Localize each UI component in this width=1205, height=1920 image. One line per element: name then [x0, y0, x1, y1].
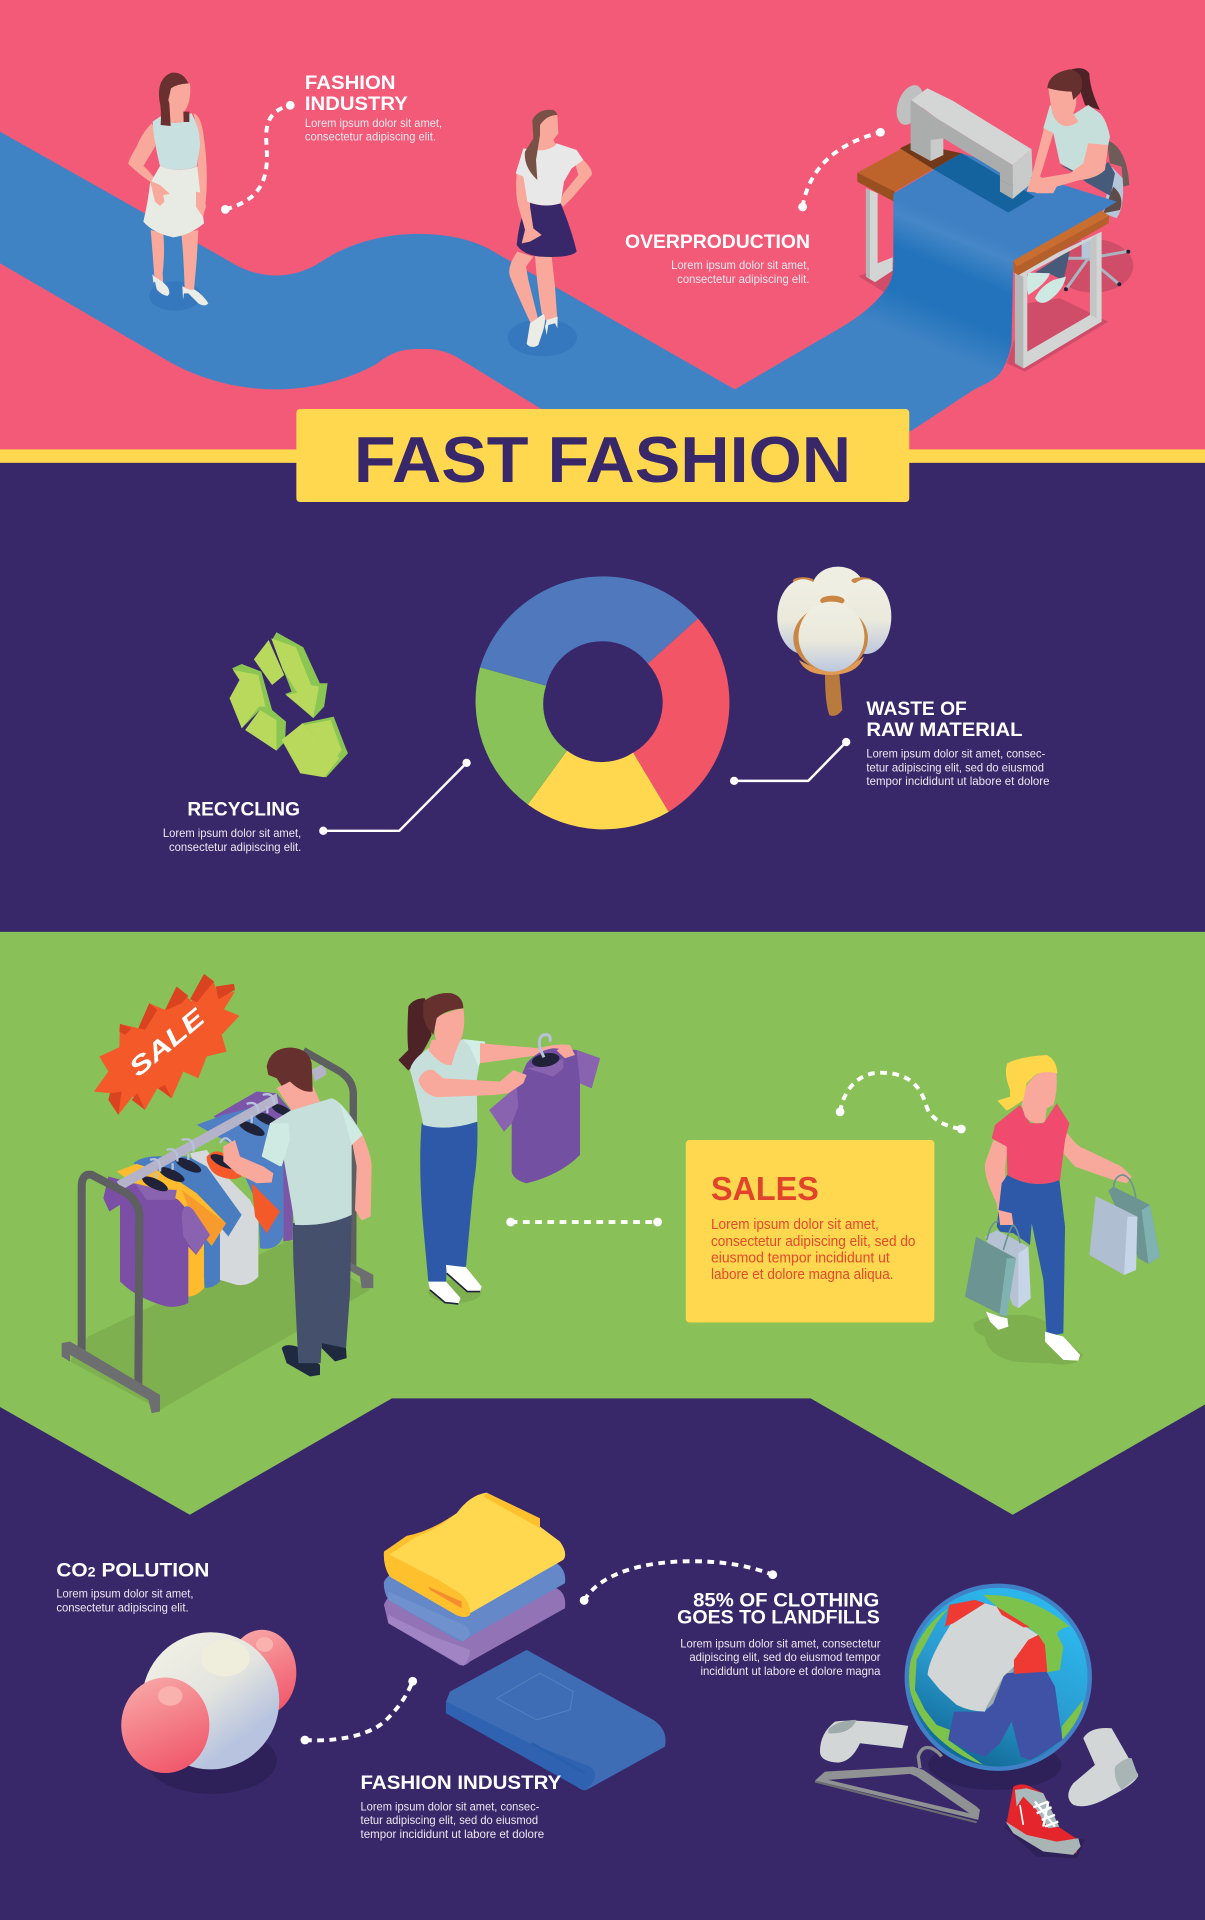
text: fashion industry top: Lorem ipsum dolor sit amet, [305, 116, 442, 130]
sewing table back parts [857, 140, 1133, 372]
dotted connector: clothes to landfills [580, 1561, 777, 1605]
text: overproduction [625, 231, 810, 286]
woman in navy skirt [508, 110, 592, 356]
folded jeans [446, 1650, 666, 1790]
dotted connector: sales arc [836, 1073, 966, 1133]
text: fashion industry bottom: Lorem ipsum dolor sit amet, consec- [361, 1799, 539, 1813]
stack of folded clothes [384, 1493, 565, 1666]
seated woman [1027, 68, 1110, 193]
text: recycling: consectetur adipiscing elit. [169, 840, 301, 854]
text: fashion industry top: consectetur adipiscing elit. [305, 130, 436, 144]
text: waste of raw material: tempor incididunt ut labore et dolore [866, 774, 1050, 788]
callout: sales box: consectetur adipiscing elit, sed do [711, 1234, 916, 1250]
red sneaker [1003, 1784, 1085, 1858]
text: 85 percent to landfills [677, 1590, 881, 1678]
text: overproduction: consectetur adipiscing elit. [677, 272, 809, 286]
text: 85 percent to landfills: incididunt ut labore et dolore magna [700, 1664, 881, 1678]
recycling leader line [319, 759, 471, 835]
hangers [140, 1101, 293, 1194]
icon: recycling arrows [230, 632, 348, 777]
blue fabric ribbon [0, 132, 1117, 453]
woman in white dress [128, 73, 208, 311]
clothes stack and jeans [384, 1493, 666, 1790]
text: co2 pollution [56, 1560, 209, 1614]
text: waste of raw material: RAW MATERIAL [866, 719, 1023, 741]
right bags [1089, 1175, 1160, 1275]
waste leader line [730, 738, 850, 785]
text: co2 pollution: CO2 POLUTION [56, 1560, 209, 1582]
text: co2 pollution: consectetur adipiscing elit. [56, 1600, 189, 1614]
donut chart [476, 576, 729, 829]
title banner: FAST FASHION [354, 423, 851, 496]
text: fashion industry bottom: tempor incididunt ut labore et dolore [361, 1827, 544, 1841]
text: fashion industry top: FASHION [305, 72, 396, 94]
dotted connector: spheres to jeans [301, 1677, 417, 1744]
text: fashion industry top: INDUSTRY [305, 93, 408, 115]
dotted connector: fashion industry [221, 101, 295, 214]
sewing table front parts and worker [892, 68, 1110, 368]
text: overproduction: Lorem ipsum dolor sit amet, [671, 258, 809, 272]
text: recycling: Lorem ipsum dolor sit amet, [163, 826, 301, 840]
panel: environmental impact [56, 1493, 1138, 1858]
text: 85 percent to landfills: Lorem ipsum dolor sit amet, consectetur [680, 1637, 880, 1651]
left bags [965, 1221, 1031, 1317]
sale burst [94, 974, 239, 1115]
sewing machine [892, 81, 1033, 199]
text: waste of raw material: tetur adipiscing elit, sed do eiusmod [866, 760, 1044, 774]
woman with shopping bags [965, 1055, 1160, 1365]
text: co2 pollution: Lorem ipsum dolor sit amet, [56, 1587, 193, 1601]
callout: sales box: SALES [711, 1171, 819, 1208]
hanger [815, 1747, 980, 1822]
text: waste of raw material [866, 698, 1050, 788]
text: 85 percent to landfills: 85% OF CLOTHING [693, 1590, 879, 1612]
text: fashion industry bottom: FASHION INDUSTRY [361, 1772, 561, 1794]
woman holding shirt [398, 993, 600, 1304]
dotted connector: overproduction [798, 128, 885, 211]
right sock [1068, 1728, 1138, 1806]
callout: sales box: eiusmod tempor incididunt ut [711, 1250, 890, 1266]
panel: waste chart section [163, 567, 1050, 854]
purple shirt [489, 1035, 600, 1183]
co2 spheres [121, 1630, 296, 1794]
text: recycling: RECYCLING [187, 799, 300, 821]
globe with discarded clothes [905, 1584, 1092, 1790]
two standing women [128, 73, 592, 356]
callout: sales box: labore et dolore magna aliqua. [711, 1267, 893, 1283]
text: fashion industry top [305, 72, 442, 144]
landfill objects [815, 1584, 1138, 1858]
clothes rack [62, 1051, 373, 1413]
title banner [0, 409, 1205, 502]
hanging garments [103, 1092, 293, 1307]
rack, man and sale burst [62, 974, 373, 1413]
text: fashion industry bottom: tetur adipiscing elit, sed do eiusmod [361, 1813, 538, 1827]
icon: cotton boll [777, 567, 891, 716]
sale burst: SALE [124, 1003, 211, 1082]
dotted connector: sales horizontal [506, 1218, 662, 1226]
text: 85 percent to landfills: adipiscing elit, sed do eiusmod tempor [689, 1650, 880, 1664]
man browsing [223, 1048, 372, 1377]
left sock [820, 1720, 908, 1763]
panel: fashion production [0, 68, 1133, 453]
callout: sales box [686, 1140, 934, 1322]
text: 85 percent to landfills: GOES TO LANDFILLS [677, 1607, 880, 1629]
text: waste of raw material: WASTE OF [866, 698, 967, 720]
text: overproduction: OVERPRODUCTION [625, 231, 810, 253]
text: fashion industry bottom [361, 1772, 561, 1841]
text: recycling [163, 799, 301, 854]
text: waste of raw material: Lorem ipsum dolor sit amet, consec- [866, 746, 1045, 760]
panel: sales section [62, 974, 1160, 1413]
callout: sales box: Lorem ipsum dolor sit amet, [711, 1217, 879, 1233]
